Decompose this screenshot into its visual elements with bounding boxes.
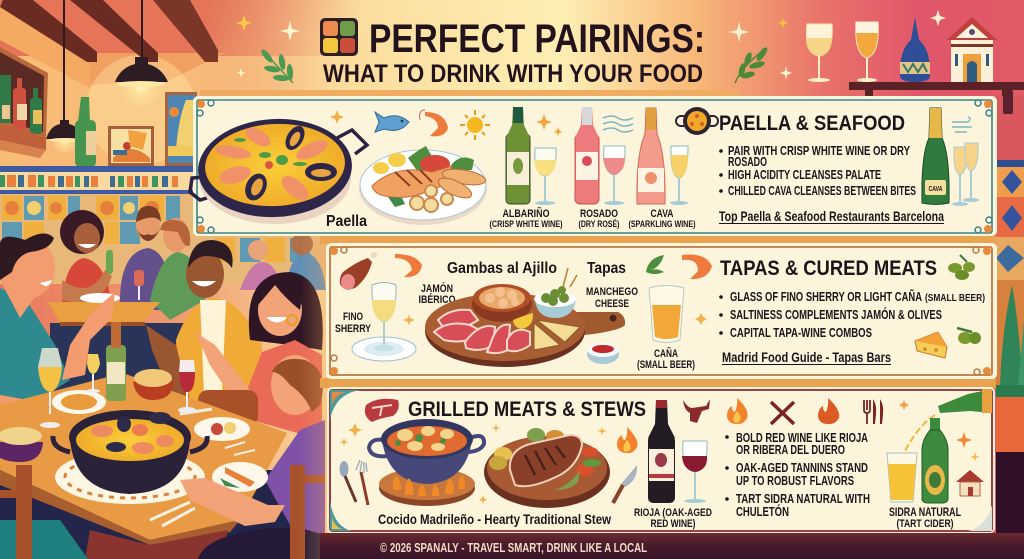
label: Sidra natural: SIDRA NATURAL [889,507,961,519]
cava bottle and flutes: CAVA [928,184,943,193]
right side scene strip [996,90,1024,559]
icon: paella pan [676,107,718,135]
sparkles [340,423,607,504]
panel: grilled meats & stews [327,387,995,533]
wall pictures [108,92,197,166]
label: Rioja: RIOJA (OAK-AGED [634,507,712,519]
icon: spoon and fork [340,460,368,505]
label: Cava: CAVA [650,208,674,220]
bullet list: (SMALL BEER) [925,292,985,304]
icon: shrimp [420,110,448,136]
paella pan [190,115,367,224]
bullet list [725,431,870,519]
diner woman [62,258,112,315]
icon: tapas box [320,18,358,56]
label: Caña [637,347,695,371]
bearded man [120,248,170,310]
cheese [534,323,560,350]
label: Sidra natural: (TART CIDER) [896,518,954,530]
label: Albariño: ALBARIÑO [502,207,550,220]
man turned away [150,252,205,320]
white wine bottle and glass [506,107,556,205]
sauce cup [587,343,619,364]
ceiling beams [0,0,97,62]
icon: flame [727,398,748,424]
bullet list: ROSADO [728,155,767,169]
icon: olives [948,255,975,280]
heading: grilled meats & stews: GRILLED MEATS & STEWS [408,398,646,421]
house [947,17,997,40]
icon: olives [957,328,981,344]
under table shadows and trousers [0,470,300,559]
bullet list: OR RIBERA DEL DUERO [736,443,845,457]
title block [320,17,705,88]
icon: cheese [915,332,947,358]
icon: knife [613,465,637,503]
wall bottle [75,97,96,167]
label: Rioja [634,507,712,530]
rosado bottle and glass [575,107,633,205]
bullet list: HIGH ACIDITY CLEANSES PALATE [728,168,881,182]
icon: cutlery [864,399,883,424]
diner in yellow [146,240,262,404]
label: Rosado: ROSADO [580,208,618,220]
subheading: WHAT TO DRINK WITH YOUR FOOD [323,60,703,88]
lemon [513,313,533,329]
laughing woman [195,272,323,440]
bullet list: UP TO ROBUST FLAVORS [736,474,854,488]
cava rosé bottle and flute [637,108,688,205]
left man in teal shirt [0,233,115,425]
wine glasses and bottle on table [38,322,196,428]
label: Albariño: (CRISP WHITE WINE) [490,219,562,229]
cava bottle and flutes [922,108,979,206]
icon: crossed fork and knife [771,402,794,424]
label: Fino Sherry: SHERRY [335,323,372,335]
beer glass [649,286,684,342]
fish plate [359,146,487,225]
label: Rosado [578,208,620,229]
heading: PERFECT PAIRINGS: [369,17,705,61]
icon: ham [340,252,377,290]
heading: tapas & cured meats: TAPAS & CURED MEATS [720,257,937,280]
cider pouring and bottle [887,389,992,503]
boy in purple shirt [180,355,325,559]
label: Manchego cheese [586,286,638,310]
icon: steak [365,399,399,422]
hanging lamps [46,0,168,155]
wall shelf with bottles [0,47,48,158]
table [0,373,287,559]
heading: paella & seafood: PAELLA & SEAFOOD [719,112,905,135]
footer copyright text: © 2026 SPANALY - TRAVEL SMART, DRINK LIKE A LOCAL [380,541,647,555]
link: tapas guide: Madrid Food Guide - Tapas Bars [722,349,891,365]
label: Gambas al Ajillo: Gambas al Ajillo [447,260,557,277]
wall [0,40,340,200]
icon: house [956,470,984,496]
wine glass [806,24,832,56]
blue bottle [900,17,930,82]
shelf with glasses, bottle and house [806,17,1024,96]
label: Jamón Ibérico [418,282,456,306]
grilled steak plate [484,428,610,508]
icon: fish [375,112,409,132]
bullet list: OAK-AGED TANNINS STAND [736,461,868,475]
label: Caña: (SMALL BEER) [637,359,695,371]
bullet list: TART SIDRA NATURAL WITH [736,492,870,506]
bullet list [719,289,985,340]
icon: bull [683,399,710,423]
panel: tapas & cured meats [326,243,997,379]
bullet list: CAPITAL TAPA-WINE COMBOS [730,326,872,340]
icon: shrimp [682,254,712,279]
gap strips between panels [200,90,1000,388]
restaurant scene illustration [0,0,360,559]
lower dark room area [50,323,240,393]
paella pot on table [53,410,207,504]
bullet list: SALTINESS COMPLEMENTS JAMÓN & OLIVES [730,307,942,322]
label: Fino Sherry: FINO [343,311,363,323]
label: Fino Sherry [335,311,372,335]
label: Cocido Madrileño: Cocido Madrileño - Hearty Traditional Stew [378,512,611,527]
jamón slices [434,310,530,353]
tile wainscot [0,166,330,284]
footer band [320,533,1024,559]
label: Rioja: RED WINE) [650,518,696,530]
label: Tapas: Tapas [587,260,626,277]
label: Jamón Ibérico: JAMÓN [421,282,453,295]
ceiling [0,0,360,56]
fino sherry glass [352,282,416,361]
label: Cava [628,208,696,229]
panel: paella & seafood [190,96,997,236]
rioja bottle and glass [648,400,707,503]
icon: flame [617,427,638,453]
label: Jamón Ibérico: IBÉRICO [418,293,456,306]
beer glass [856,22,878,58]
far diners [240,262,282,290]
bullet list [719,144,916,198]
olives bowl [535,300,576,318]
gambas bowl [472,286,532,322]
icon: shrimp [395,254,422,277]
sparkles [956,432,980,462]
label: Paella: Paella [326,213,367,230]
label: Rosado: (DRY ROSÉ) [578,219,620,229]
header sparkles and leaves [236,10,946,83]
label: Cava: (SPARKLING WINE) [628,219,696,229]
plates on table [52,390,255,526]
bullet list: CHULETÓN [736,504,789,519]
label: Manchego cheese: CHEESE [595,298,629,310]
bread bowls [0,369,174,462]
link: restaurants: Top Paella & Seafood Restaurants Barcelona [719,208,944,224]
label: Caña: CAÑA [654,347,678,360]
stew pot on fire [369,419,484,506]
bullet list: GLASS OF FINO SHERRY OR LIGHT CAÑA [730,289,922,304]
icon: leaf [646,255,664,274]
back table [48,270,160,326]
bullet list: PAIR WITH CRISP WHITE WINE OR DRY [728,144,910,158]
tapas board [425,268,625,367]
label: Manchego cheese: MANCHEGO [586,286,638,298]
bullet list: CHILLED CAVA CLEANSES BETWEEN BITES [728,184,916,198]
icon: sun [460,110,490,140]
background diners [60,206,326,320]
label: Albariño [490,207,562,229]
label: Sidra natural [889,507,961,530]
scene fade to panels [300,236,328,559]
bullet list: BOLD RED WINE LIKE RIOJA [736,431,868,445]
icon: flame [818,398,839,424]
